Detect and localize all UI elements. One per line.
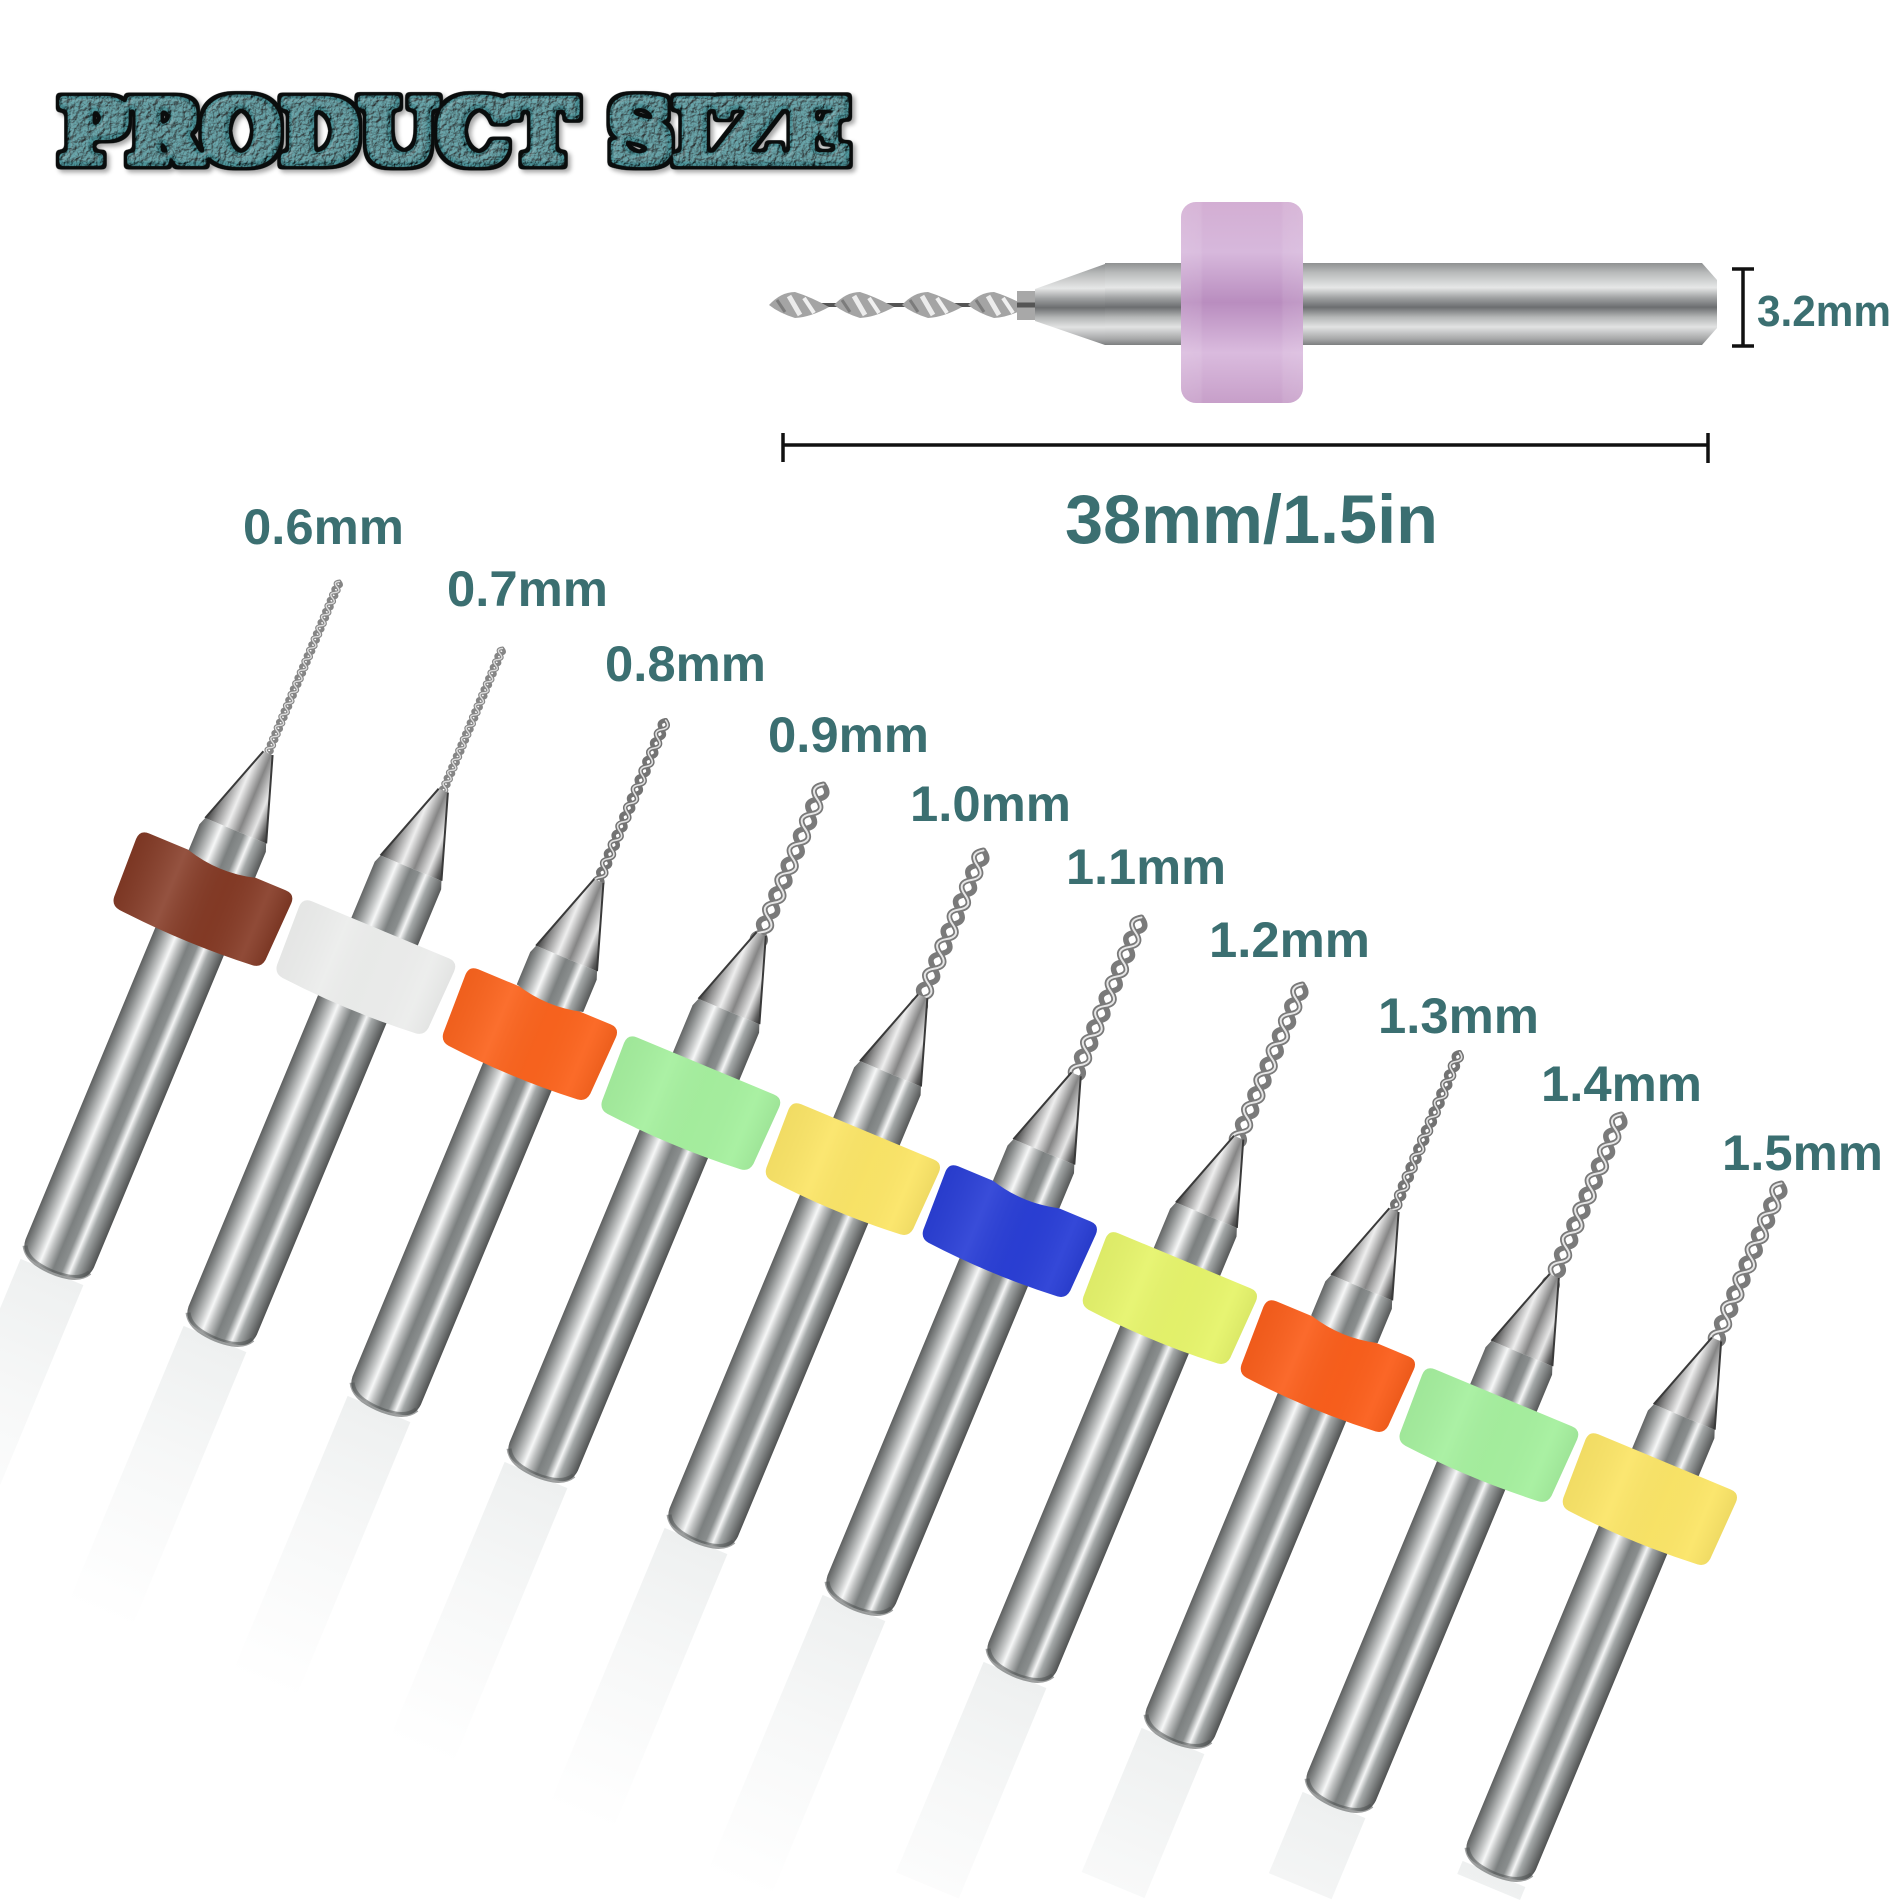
label: 0.8mm: 0.8mm [605,636,766,692]
drill 1.3mm [1036,1020,1533,1900]
label: 1.5mm: 1.5mm [1722,1125,1883,1181]
label: 1.0mm: 1.0mm [910,776,1071,832]
label: 3.2mm: 3.2mm [1757,287,1891,336]
top drill shank [1105,263,1717,345]
label: 1.3mm: 1.3mm [1378,988,1539,1044]
label: 0.6mm: 0.6mm [243,499,404,555]
label: 0.7mm: 0.7mm [447,561,608,617]
drill 0.6mm [0,547,413,1579]
top drill flute [769,291,1035,320]
drill 0.9mm [342,752,900,1784]
dimension: shank diameter bracket [1732,269,1754,346]
label: 0.9mm: 0.9mm [768,707,929,763]
drill 0.7mm [18,614,576,1647]
drill 1.5mm [1412,1152,1856,1900]
top drill cone [1035,264,1105,345]
top drill bit diagram [769,202,1717,403]
label: 1.4mm: 1.4mm [1541,1056,1702,1112]
drill 1.1mm [662,885,1215,1900]
dimension: length line [783,433,1708,463]
drill 1.4mm [1223,1082,1699,1900]
drill 1.2mm [850,952,1375,1900]
top drill collar [1181,202,1303,403]
label: 1.1mm: 1.1mm [1066,839,1226,895]
drill 0.8mm [183,687,736,1715]
title: PRODUCT SIZE [59,83,850,183]
label: 1.2mm: 1.2mm [1209,912,1370,968]
label: 38mm/1.5in: 38mm/1.5in [1065,481,1438,558]
drill 1.0mm [507,820,1060,1850]
